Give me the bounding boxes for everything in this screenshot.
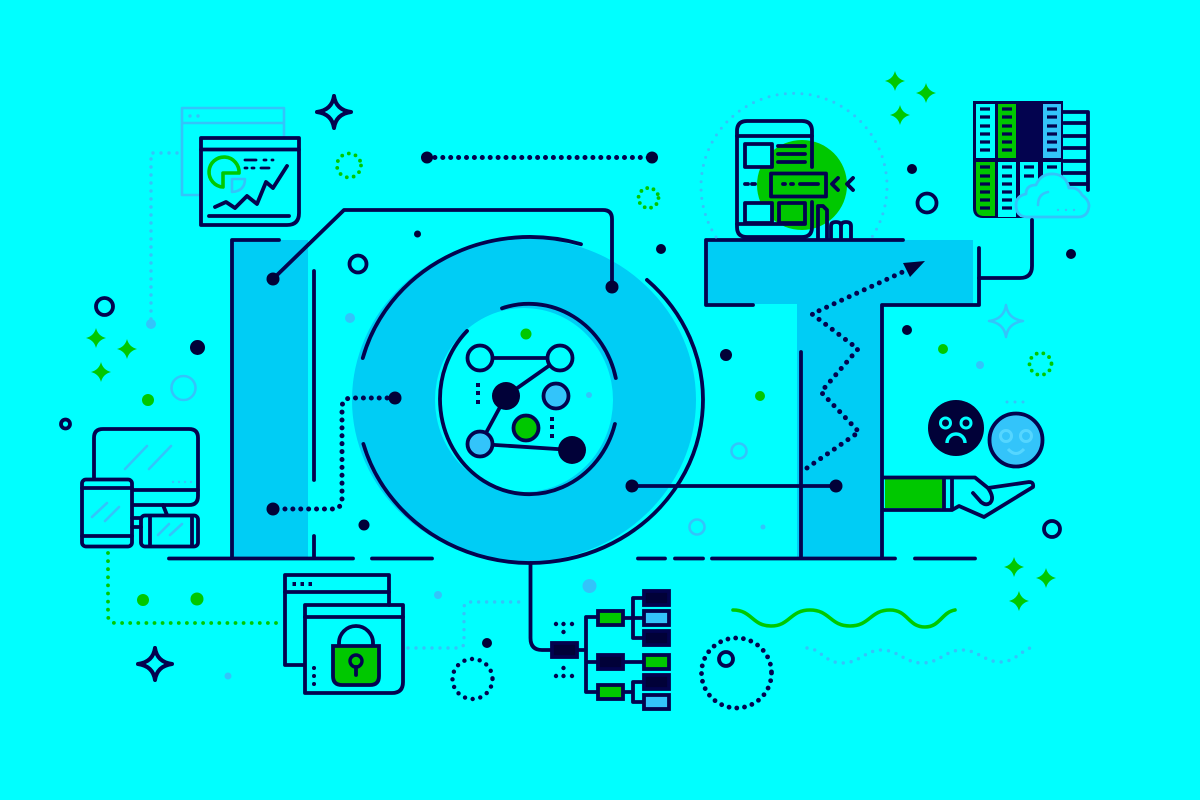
decorative circles and dots [61, 164, 1076, 680]
node network inside O [468, 328, 592, 464]
icon: devices [82, 429, 198, 546]
connector: dotted I to O [266, 392, 402, 516]
icon: hand with sleeve [883, 478, 1033, 517]
icon: happy face [990, 402, 1042, 466]
letter O [352, 237, 703, 563]
connector: O to T [626, 480, 842, 492]
icon: phone with UI [737, 121, 853, 238]
sparkle light right [989, 305, 1023, 337]
icon: light browser window [182, 108, 284, 195]
hierarchy tree [530, 563, 669, 709]
green sparkles top right [885, 71, 936, 125]
dotted line top [421, 152, 658, 164]
connector: green dotted [108, 553, 280, 623]
dotted zigzag arrow [807, 261, 925, 468]
letter I [232, 240, 314, 557]
ground line [169, 557, 975, 560]
icon: dotted halo behind phone [701, 93, 887, 237]
light dotted wave [807, 648, 1030, 663]
green sparkles right [1004, 557, 1056, 611]
dotted rings [337, 154, 1052, 708]
icon: green circle [757, 140, 847, 230]
connector: light dotted left [146, 153, 177, 329]
connector: light dotted bottom [408, 602, 526, 648]
icon: analytics window [201, 138, 299, 225]
connector: I to O top circuit [266, 210, 618, 294]
letter T [706, 240, 979, 557]
icon: lock windows [285, 575, 403, 693]
icon: cloud [1016, 174, 1089, 217]
icon: sad face [928, 400, 984, 456]
sparkle top centre [317, 96, 351, 128]
connector: T to cloud [979, 220, 1032, 278]
icon: server grid [973, 101, 1088, 218]
sparkle bottom left [138, 648, 172, 680]
green sparkles left [86, 328, 137, 382]
green wave [733, 610, 955, 627]
